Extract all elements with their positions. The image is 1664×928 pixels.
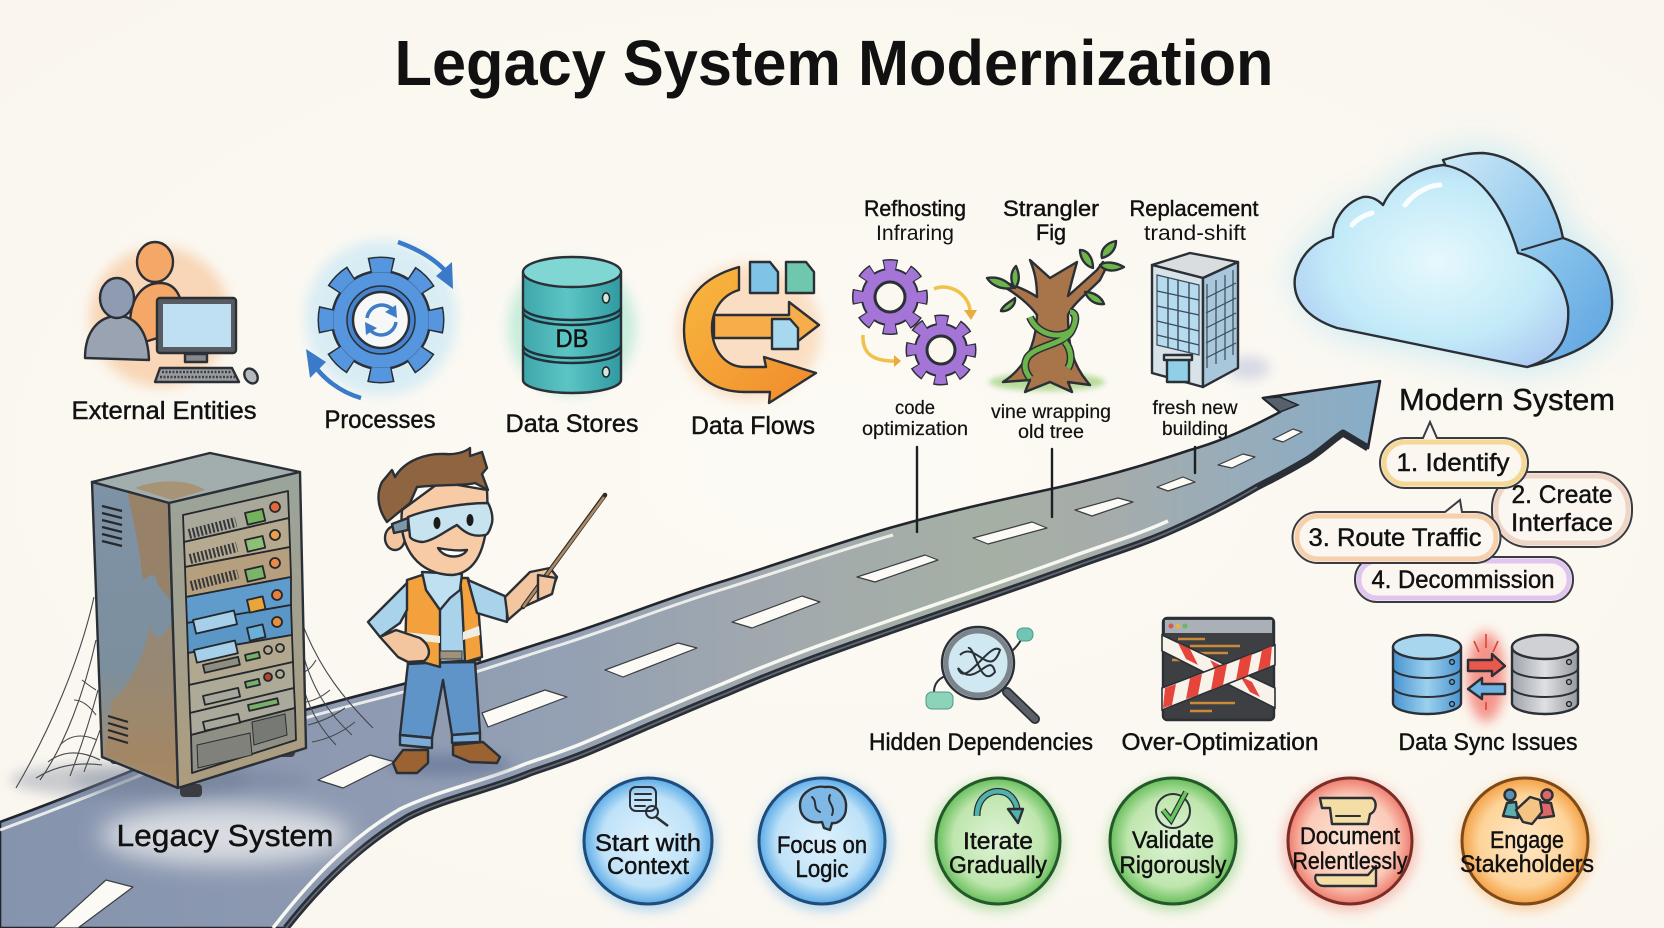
smile [438,548,467,556]
server rack units [183,491,296,773]
caption: code optimization [862,397,968,440]
label: hidden dependencies: Hidden Dependencies [869,729,1093,756]
boots [393,750,428,773]
icon: over-optimization code window with tape [1162,618,1275,720]
badge: engage stakeholders: Stakeholders [1460,851,1594,878]
step 1 bubble [1380,422,1528,488]
badge: focus on logic: Logic [796,856,848,883]
jeans [400,662,480,738]
heading: strangler fig: Strangler [1003,196,1099,221]
server vents [102,506,128,743]
label: processes: Processes [324,406,436,434]
shirt torso [408,575,480,664]
label: legacy system: Legacy System [116,818,334,853]
badge: document relentlessly: Document [1300,823,1400,850]
label: modern system: Modern System [1399,382,1615,417]
label: external entities: External Entities [72,397,256,425]
caption: vine wrapping old tree: vine wrapping [991,401,1111,423]
right arm [468,580,507,622]
badge: focus on logic [757,778,891,911]
collar [422,572,462,610]
icon: document top right [786,262,814,293]
badge: iterate gradually: Gradually [949,852,1047,879]
badge: document relentlessly: Relentlessly [1292,848,1408,875]
badge: document relentlessly [1283,778,1417,911]
ear [385,526,405,550]
step 3 bubble: 3. Route Traffic [1308,524,1482,552]
badge: engage stakeholders: Engage [1490,827,1564,854]
left arm [368,583,407,637]
server grills [189,522,238,586]
heading: rehosting [864,196,966,245]
panel: data stores icon [508,257,636,395]
icon: new building [1152,253,1270,387]
heading: strangler fig [1003,196,1099,245]
legacy server rack [70,453,310,797]
title: Legacy System Modernization [394,27,1274,99]
badge: start with context [583,778,717,911]
step 4 bubble: 4. Decommission [1372,566,1554,594]
icon: data sync issues [1393,632,1578,722]
steps callouts [1292,422,1632,602]
icon: hidden dependencies magnifier [926,627,1035,719]
panel: data flows icon [677,262,821,403]
heading: rehosting: Refhosting [864,196,966,221]
badge: iterate gradually: Iterate [963,828,1033,855]
step 2 bubble: Interface [1511,509,1613,537]
heading: replacement: Replacement [1130,196,1258,221]
heading: replacement [1130,196,1258,245]
step 2 bubble [1492,472,1632,547]
badge: iterate gradually [930,778,1064,911]
label: over-optimization: Over-Optimization [1122,729,1318,756]
caption: fresh new building [1152,397,1238,440]
panel: processes icon [305,240,457,398]
icon: tree with vine [987,241,1124,392]
badge: focus on logic: Focus on [777,832,867,859]
pointer stick [523,495,605,607]
badge: start with context: Start with [595,830,701,857]
icon: grey person [85,278,149,360]
goggles [408,503,492,542]
heading: replacement: trand-shift [1144,222,1246,245]
icon: modern cloud [1295,153,1612,367]
label: data flows: Data Flows [691,412,815,440]
vest [405,575,440,667]
icon: orange person [130,242,183,345]
face [402,482,487,575]
caption: code optimization: code [895,397,935,419]
badge: engage stakeholders [1460,778,1594,911]
step 4 bubble [1355,557,1573,602]
step 1 bubble: 1. Identify [1396,449,1510,477]
road arrow [0,381,1380,928]
icon: cobwebs [16,597,373,788]
heading: strangler fig: Fig [1036,220,1066,245]
badge: start with context: Context [607,853,689,880]
panel: external entities [85,242,261,387]
caption: fresh new building: building [1162,418,1228,440]
step 2 bubble: 2. Create [1512,481,1612,509]
panel: data stores icon: DB [556,325,588,353]
icon: computer [155,298,261,386]
engineer character [368,448,605,776]
caption: vine wrapping old tree: old tree [1018,421,1084,443]
badge: validate rigorously: Rigorously [1120,852,1226,879]
icon: purple gears [859,266,977,379]
caption: vine wrapping old tree [991,401,1111,443]
icon: document middle [772,319,798,349]
heading: rehosting: Infraring [876,222,954,245]
hair [378,448,488,522]
icon: document top left [750,262,778,293]
caption: code optimization: optimization [862,418,968,440]
caption: fresh new building: fresh new [1152,397,1238,419]
badge: validate rigorously: Validate [1132,827,1214,854]
step 3 bubble [1292,500,1500,563]
road lane markings [53,429,1302,928]
badge: validate rigorously [1107,778,1241,911]
label: data sync issues: Data Sync Issues [1398,729,1578,756]
label: data stores: Data Stores [506,410,638,438]
pointer lines to road [917,447,1195,532]
